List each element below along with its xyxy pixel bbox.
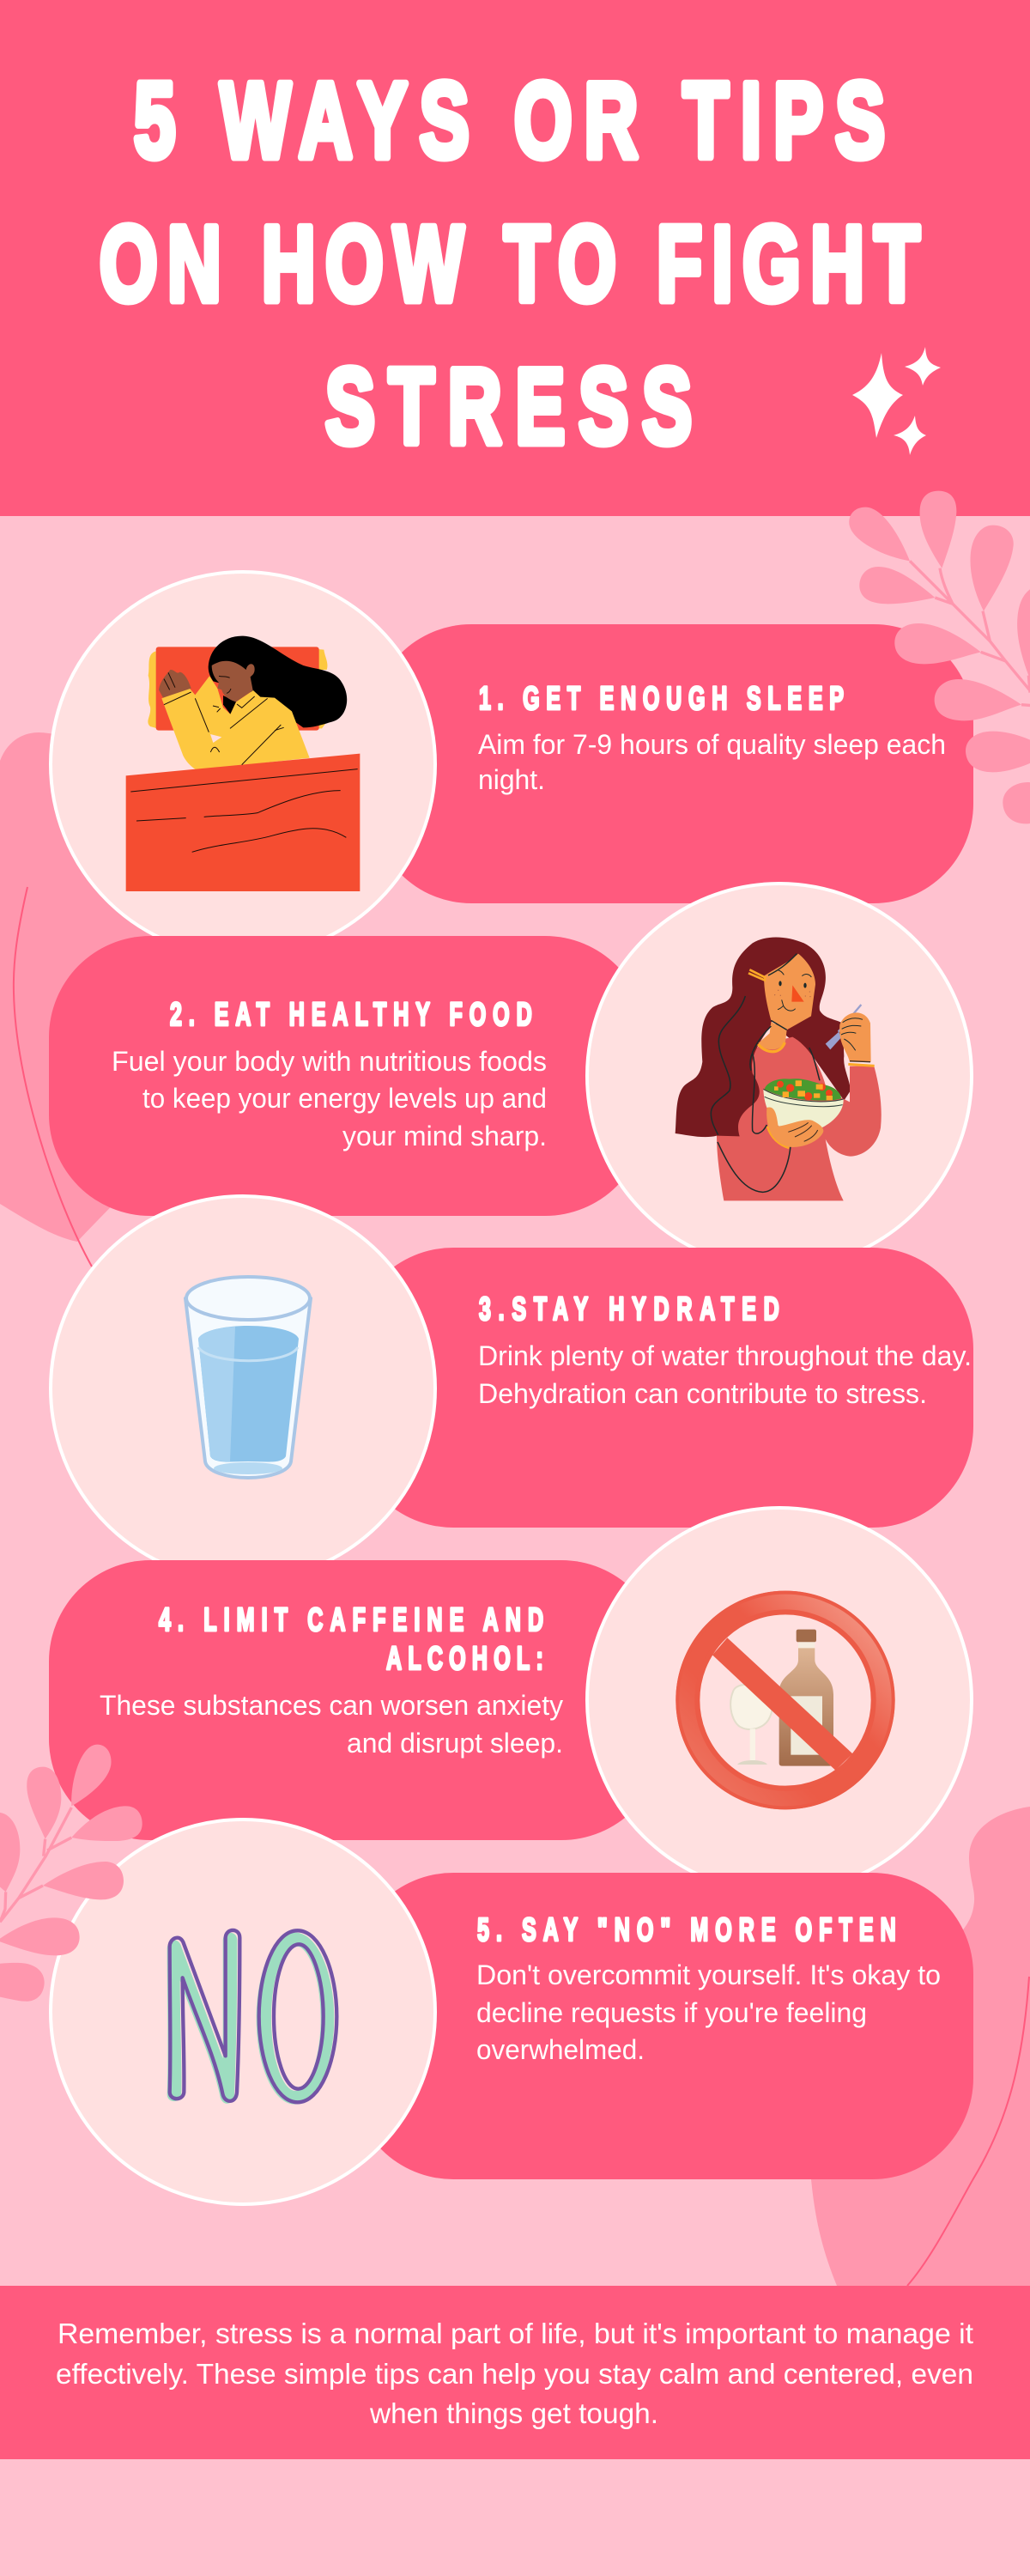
panel: tip 3 [352, 1248, 973, 1528]
title: ON HOW TO FIGHT [100, 204, 919, 324]
heading: tip 4: ALCOHOL: [386, 1640, 543, 1676]
circle: no alcohol illustration [587, 1508, 972, 1893]
panel: tip 2 [49, 936, 646, 1216]
heading: tip 3: 3.STAY HYDRATED [479, 1291, 779, 1327]
text: tip 3 [478, 1340, 972, 1409]
blob: right decorative shape [811, 1807, 1030, 2286]
text: closing message: effectively. These simple tips can help you stay calm and centered, even [56, 2358, 973, 2390]
circle: food illustration [587, 884, 972, 1268]
text: tip 2: your mind sharp. [342, 1121, 547, 1151]
circle: NO illustration [51, 1820, 435, 2204]
title [100, 61, 920, 466]
text: tip 2: to keep your energy levels up and [142, 1083, 547, 1114]
text: tip 2: Fuel your body with nutritious foods [112, 1046, 547, 1077]
text: tip 3: Drink plenty of water throughout the day. [478, 1340, 972, 1371]
icon: sleeping woman [126, 636, 360, 891]
text: tip 4 [100, 1690, 563, 1759]
text: tip 5: Don't overcommit yourself. It's okay to [476, 1959, 941, 1990]
icon: no alcohol sign [676, 1591, 895, 1809]
heading: tip 4 [159, 1601, 543, 1676]
icon: woman eating salad [676, 937, 882, 1200]
heading: tip 5: 5. SAY "NO" MORE OFTEN [477, 1911, 896, 1947]
heading: tip 4: 4. LIMIT CAFFEINE AND [159, 1601, 543, 1637]
text: closing message: when things get tough. [369, 2397, 658, 2429]
footer band [0, 2286, 1030, 2459]
panel: tip 4 [49, 1560, 663, 1840]
text: tip 5: decline requests if you're feeling [476, 1997, 867, 2028]
text: tip 1: night. [478, 764, 545, 795]
icon: glass of water [185, 1277, 311, 1478]
heading: tip 2: 2. EAT HEALTHY FOOD [170, 996, 532, 1032]
icon: sparkles [852, 347, 941, 455]
text: tip 4: These substances can worsen anxiety [100, 1690, 563, 1721]
text: tip 4: and disrupt sleep. [347, 1728, 563, 1759]
panel: tip 1 [372, 624, 973, 903]
leaves: bottom left branch [0, 1745, 142, 2002]
text: tip 3: Dehydration can contribute to stress. [478, 1378, 927, 1409]
text: tip 5 [476, 1959, 941, 2065]
icon: hand-drawn NO [167, 1930, 336, 2105]
panel: tip 5 [352, 1873, 973, 2179]
blob: left decorative shape [0, 732, 258, 1267]
circle: sleep illustration [51, 572, 435, 957]
title: 5 WAYS OR TIPS [134, 61, 885, 180]
text: tip 2 [112, 1046, 547, 1151]
text: tip 1: Aim for 7-9 hours of quality sleep each [478, 729, 946, 760]
header band [0, 0, 1030, 516]
text: closing message [56, 2318, 973, 2429]
text: closing message: Remember, stress is a normal part of life, but it's important to manage it [58, 2318, 973, 2349]
heading: tip 1: 1. GET ENOUGH SLEEP [479, 680, 844, 716]
text: tip 5: overwhelmed. [476, 2034, 645, 2065]
title: STRESS [325, 347, 692, 466]
text: tip 1 [478, 729, 946, 795]
leaves: top right branch [849, 491, 1030, 823]
circle: water illustration [51, 1196, 435, 1581]
